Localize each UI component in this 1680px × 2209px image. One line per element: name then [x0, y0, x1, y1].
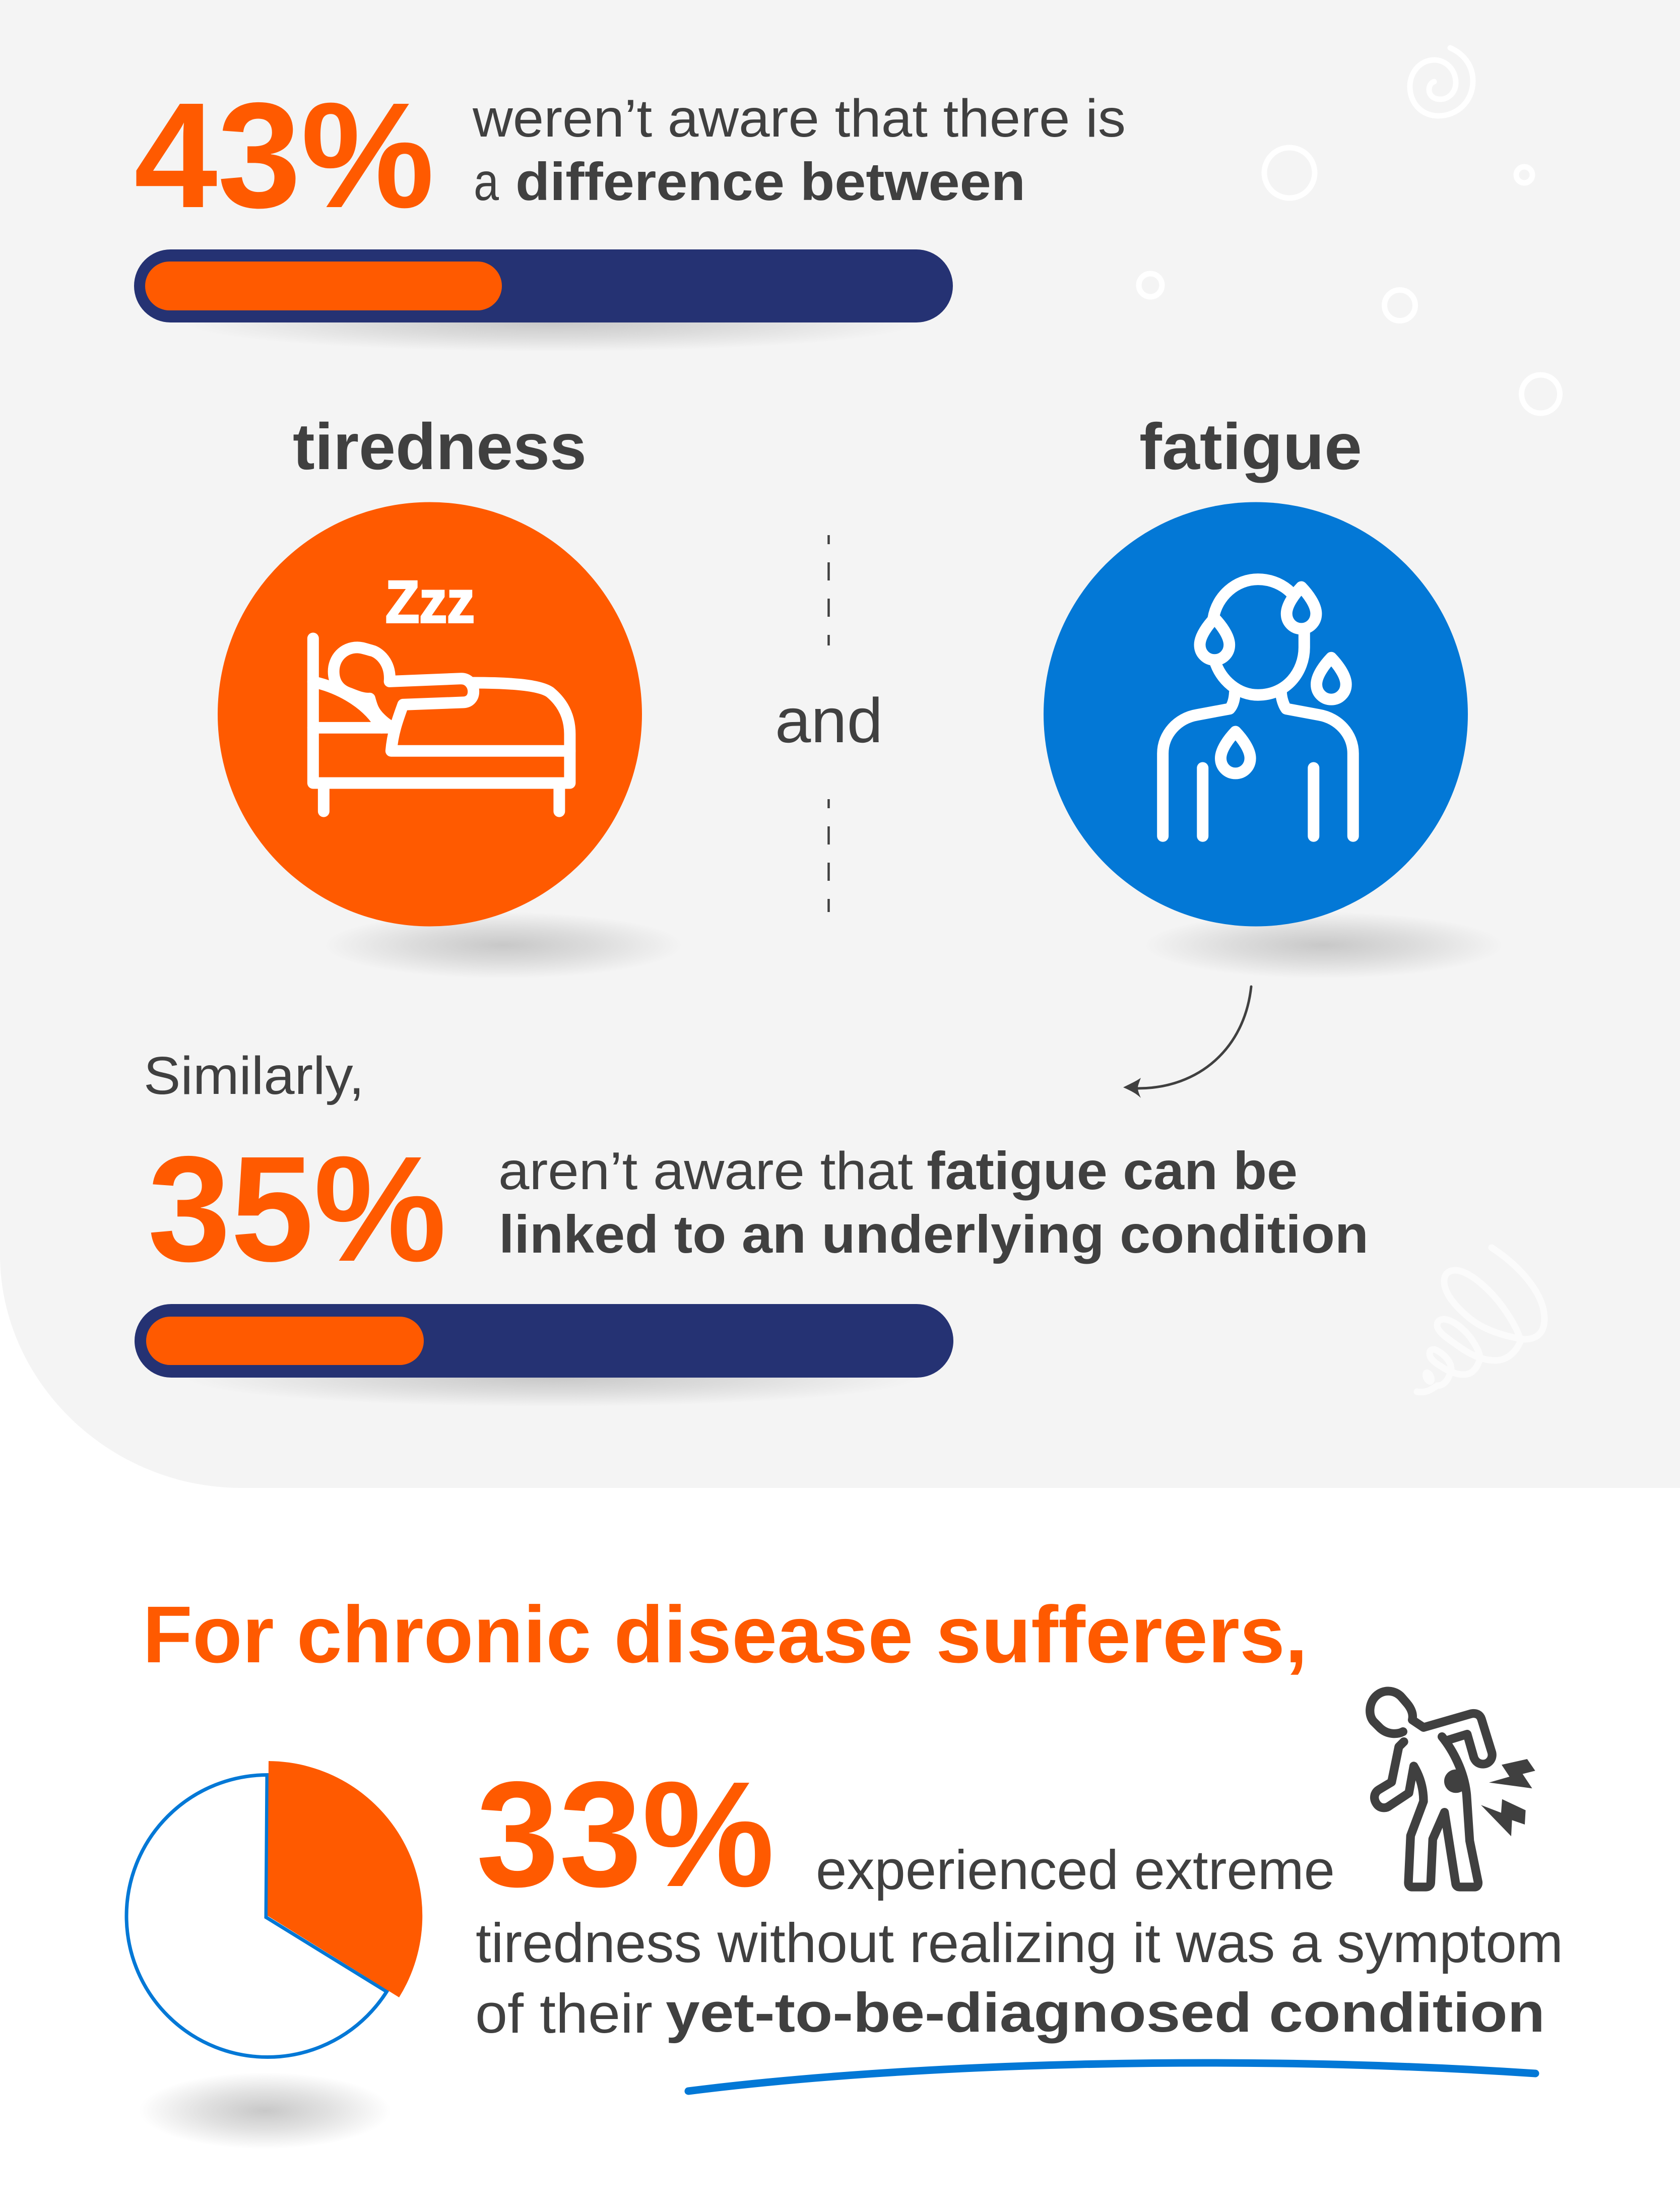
icon: sleeping person in bed	[218, 502, 642, 926]
circle shadow: tiredness	[324, 912, 683, 979]
decorative white doodles top right	[1139, 48, 1560, 413]
stat: 43 percent: 43%	[134, 72, 434, 239]
pie chart: 33 percent	[126, 1761, 422, 2149]
dashed divider with and: and	[775, 686, 883, 756]
text block: experienced extreme tiredness	[475, 1839, 1563, 2045]
stat: 33 percent: 33%	[476, 1750, 774, 1918]
icon: sleeping person in bed: Zzz	[385, 569, 475, 635]
arrow: curved pointing left	[1123, 987, 1251, 1098]
text block: fatigue can be linked: linked to an underlying condition	[499, 1205, 1369, 1264]
text block: experienced extreme tiredness: tiredness without realizing it was a symptom	[476, 1912, 1563, 1974]
text block: difference between	[472, 89, 1126, 212]
text block: difference between: weren’t aware that there is	[472, 89, 1126, 148]
stat: 35 percent: 35%	[148, 1125, 446, 1293]
circle shadow: fatigue	[1144, 912, 1503, 979]
heading: tiredness: tiredness	[293, 410, 587, 483]
text block: fatigue can be linked: aren’t aware that	[498, 1141, 913, 1201]
icon: person with back pain	[1370, 1691, 1535, 1887]
text block: experienced extreme tiredness: yet-to-be-diagnosed condition	[666, 1982, 1545, 2044]
text: Similarly: Similarly,	[144, 1046, 364, 1106]
decorative scribble	[1417, 1248, 1544, 1392]
underline stroke	[688, 2063, 1535, 2091]
text block: fatigue can be linked	[498, 1141, 1369, 1264]
heading: for chronic disease sufferers: For chronic disease sufferers,	[143, 1589, 1308, 1679]
text block: difference between: difference between	[515, 152, 1025, 212]
heading: fatigue: fatigue	[1139, 410, 1362, 483]
text block: difference between: a	[474, 152, 499, 212]
icon: sweating person	[1044, 502, 1468, 926]
text block: experienced extreme tiredness: of their	[475, 1983, 653, 2045]
text block: fatigue can be linked: fatigue can be	[927, 1141, 1298, 1201]
progress bar: 43 percent	[134, 249, 953, 352]
progress bar: 35 percent	[135, 1304, 953, 1407]
panel: grey top section	[0, 0, 1680, 1488]
text block: experienced extreme tiredness: experienced extreme	[816, 1839, 1335, 1901]
